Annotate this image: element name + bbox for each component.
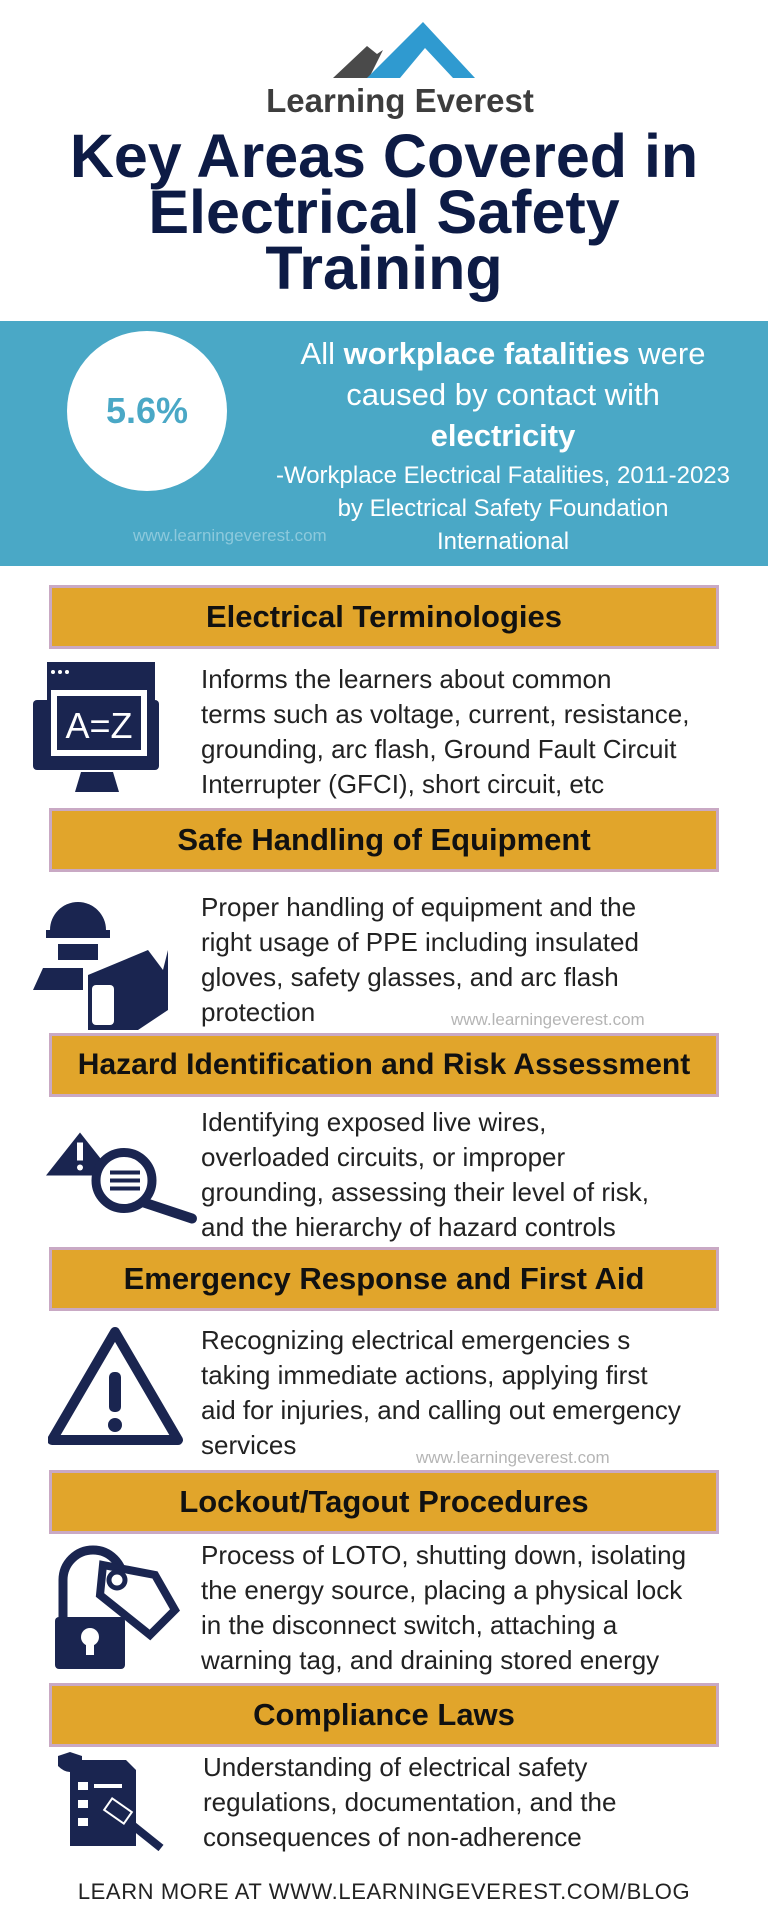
text: terminologies <box>201 664 689 799</box>
text: hazard: grounding, assessing their level of risk, <box>201 1177 649 1207</box>
icon: lock and tag <box>55 1546 180 1669</box>
text: compliance: Understanding of electrical safety <box>203 1752 587 1782</box>
text: compliance: regulations, documentation, and the <box>203 1787 616 1817</box>
text: hazard <box>201 1107 649 1242</box>
icon: compliance checklist <box>58 1752 164 1852</box>
icon: A=Z monitor <box>33 662 159 792</box>
heading: LOTO: Lockout/Tagout Procedures <box>179 1484 589 1519</box>
stat circle: 5.6% <box>106 390 188 431</box>
logo <box>266 22 534 119</box>
title: Training <box>265 234 503 302</box>
text: loto: Process of LOTO, shutting down, isolating <box>201 1540 686 1570</box>
watermark: www.learningeverest.com <box>133 526 327 545</box>
icon: warning triangle <box>48 1327 183 1445</box>
text: emergency <box>201 1325 681 1460</box>
stat text: caused by contact with <box>346 377 660 412</box>
citation <box>276 462 730 555</box>
text: emergency: aid for injuries, and calling out emergency <box>201 1395 681 1425</box>
text: hazard: Identifying exposed live wires, <box>201 1107 546 1137</box>
stat circle <box>67 331 227 491</box>
heading: Hazard <box>49 1033 719 1097</box>
heading: Compliance: Compliance Laws <box>253 1697 515 1732</box>
footer: LEARN MORE AT WWW.LEARNINGEVEREST.COM/BLOG <box>78 1879 690 1904</box>
text: loto: warning tag, and draining stored energy <box>201 1645 659 1675</box>
title: Key Areas Covered in <box>70 122 698 190</box>
stat band <box>0 321 768 566</box>
citation: -Workplace Electrical Fatalities, 2011-2023 <box>276 462 730 489</box>
citation: by Electrical Safety Foundation <box>338 495 668 522</box>
heading: LOTO <box>49 1470 719 1534</box>
logo text: Learning Everest <box>266 82 534 119</box>
text: terminologies: terms such as voltage, current, resistance, <box>201 699 689 729</box>
text: loto: in the disconnect switch, attaching a <box>201 1610 617 1640</box>
watermark: www.learningeverest.com <box>416 1448 610 1467</box>
text: hazard: overloaded circuits, or improper <box>201 1142 565 1172</box>
heading: Safe Handling <box>49 808 719 872</box>
text: loto: the energy source, placing a physical lock <box>201 1575 682 1605</box>
heading: Compliance <box>49 1683 719 1747</box>
heading: Safe Handling: Safe Handling of Equipment <box>177 822 591 857</box>
text: hazard: and the hierarchy of hazard controls <box>201 1212 616 1242</box>
icon: worker with glove <box>33 902 168 1030</box>
watermark: www.learningeverest.com <box>451 1010 645 1029</box>
text: safe handling <box>201 892 639 1027</box>
heading: Emergency: Emergency Response and First Aid <box>124 1261 644 1296</box>
text: emergency: taking immediate actions, applying first <box>201 1360 648 1390</box>
text: safe handling: right usage of PPE including insulated <box>201 927 639 957</box>
text: terminologies: Interrupter (GFCI), short circuit, etc <box>201 769 604 799</box>
title <box>70 122 698 302</box>
heading: Electrical Terminologies <box>49 585 719 649</box>
text: loto <box>201 1540 686 1675</box>
text: safe handling: Proper handling of equipment and the <box>201 892 636 922</box>
stat text: All workplace fatalities were <box>301 336 705 371</box>
stat text <box>300 336 705 453</box>
stat text: electricity <box>431 418 575 453</box>
text: safe handling: gloves, safety glasses, and arc flash <box>201 962 619 992</box>
text: safe handling: protection <box>201 997 315 1027</box>
text: emergency: Recognizing electrical emergencies s <box>201 1325 630 1355</box>
text: compliance: consequences of non-adherence <box>203 1822 582 1852</box>
text: terminologies: Informs the learners about common <box>201 664 611 694</box>
text: terminologies: grounding, arc flash, Ground Fault Circuit <box>201 734 676 764</box>
title: Electrical Safety <box>148 178 620 246</box>
citation: International <box>437 528 569 555</box>
icon: mountains <box>333 22 475 78</box>
icon: A=Z monitor: A=Z <box>65 705 133 746</box>
heading: Emergency <box>49 1247 719 1311</box>
text: emergency: services <box>201 1430 296 1460</box>
icon: hazard magnifier <box>46 1132 197 1224</box>
heading: Electrical Terminologies: Electrical Terminologies <box>206 599 562 634</box>
text: compliance <box>203 1752 616 1852</box>
heading: Hazard: Hazard Identification and Risk Assessment <box>78 1048 690 1081</box>
